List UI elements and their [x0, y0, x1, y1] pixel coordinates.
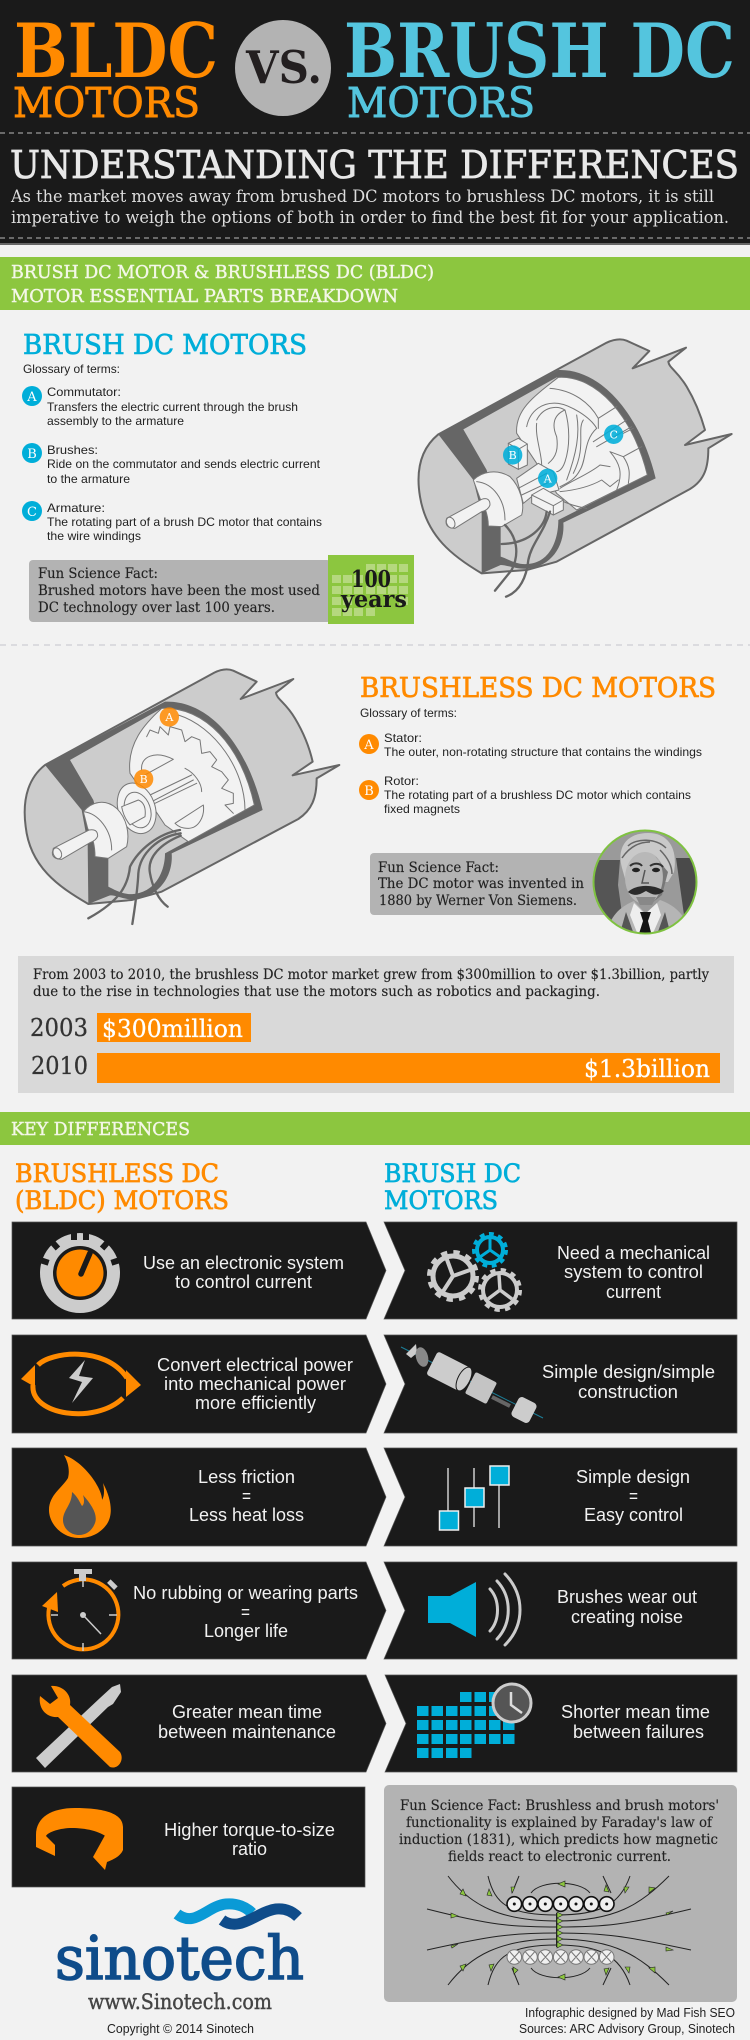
section banner: key differences: [0, 1112, 750, 1145]
intro paragraph: imperative to weigh the options of both in order to find the best fit for your application.: [11, 208, 729, 228]
website address: www.Sinotech.com: [88, 1990, 272, 2014]
icon: calendar clock: [417, 1684, 531, 1758]
row 5 left: maintenance: [12, 1675, 386, 1772]
row 1 left: electronic control: [12, 1222, 386, 1319]
row text: [189, 1467, 304, 1525]
callout: DC motor invention fact: Fun Science Fact:: [378, 860, 499, 876]
marker A: A: [164, 711, 174, 724]
callout: brushed motors fun fact: Brushed motors have been the most used: [38, 583, 320, 599]
title: BLDC motors: [13, 7, 218, 127]
row text: Easy control: [584, 1505, 683, 1525]
term: brushes: B: [27, 447, 37, 462]
term: rotor: [359, 774, 691, 816]
row text: [561, 1702, 710, 1742]
callout: brushed motors fun fact: DC technology over last 100 years.: [38, 600, 275, 616]
marker B: B: [509, 449, 517, 462]
panel: brush DC motors glossary: [22, 329, 322, 543]
icon: speaker: [428, 1574, 520, 1645]
column heading: brushless: [15, 1159, 229, 1215]
row 6 left: torque: [12, 1787, 365, 1887]
term: rotor: fixed magnets: [384, 802, 460, 816]
callout: brushed motors fun fact: Fun Science Fact:: [38, 566, 158, 582]
row text: No rubbing or wearing parts: [133, 1583, 358, 1603]
icon: flame: [49, 1455, 111, 1538]
bar: 2003: $300million: [102, 1015, 243, 1043]
header banner: [0, 0, 750, 245]
credits and sources: Sources: ARC Advisory Group, Sinotech: [519, 2021, 735, 2036]
diagram: brush DC motor cutaway: [419, 339, 732, 597]
bar: 2010: $1.3billion: [584, 1055, 710, 1083]
term: armature: the wire windings: [47, 529, 141, 543]
fact text: functionality is explained by Faraday's law of: [406, 1815, 714, 1831]
row text: system to control: [564, 1262, 703, 1282]
marker B: [503, 445, 522, 465]
column heading: brush: MOTORS: [384, 1186, 498, 1215]
term: stator: A: [363, 738, 374, 753]
panel: market growth chart: [18, 956, 734, 1093]
row text: [557, 1587, 697, 1627]
callout: DC motor invention fact: The DC motor was invented in: [378, 876, 584, 892]
row 4 left: longer life: [12, 1562, 386, 1659]
icon: tools: [36, 1684, 122, 1768]
section banner: key differences: KEY DIFFERENCES: [11, 1119, 190, 1140]
row 1 right: mechanical control: [384, 1222, 737, 1319]
row text: [557, 1243, 710, 1302]
icon: dial: [39, 1231, 121, 1313]
callout: DC motor invention fact: [370, 853, 630, 915]
row text: current: [606, 1282, 661, 1302]
row text: =: [242, 1486, 251, 1506]
term: rotor: Rotor:: [384, 774, 419, 788]
row text: between maintenance: [158, 1722, 336, 1742]
icon: sliders: [440, 1466, 509, 1530]
icon: power cycle: [21, 1354, 141, 1414]
fact text: Fun Science Fact: Brushless and brush motors': [400, 1798, 719, 1814]
row text: construction: [578, 1382, 678, 1402]
row 5 right: failures: [385, 1675, 737, 1772]
diagram: magnetic field lines: [427, 1876, 691, 1985]
term: armature: [22, 501, 322, 543]
column heading: brushless: (BLDC) MOTORS: [15, 1186, 229, 1215]
credits and sources: Infographic designed by Mad Fish SEO: [525, 2005, 735, 2020]
fact text: induction (1831), which predicts how magnetic: [399, 1832, 718, 1848]
copyright: Copyright © 2014 Sinotech: [107, 2022, 254, 2036]
market growth text: due to the rise in technologies that use the motors such as robotics and packaging.: [33, 984, 600, 1000]
row text: to control current: [175, 1272, 312, 1292]
market growth text: From 2003 to 2010, the brushless DC motor market grew from $300million to over $1.3billion, partly: [33, 967, 709, 983]
row text: ratio: [232, 1839, 267, 1859]
row text: =: [629, 1486, 638, 1506]
heading: brush DC motors: BRUSH DC MOTORS: [23, 329, 307, 361]
callout: DC motor invention fact: 1880 by Werner Von Siemens.: [379, 893, 577, 909]
row 3 left: less friction: [12, 1448, 386, 1546]
row text: =: [241, 1602, 250, 1622]
row text: Less friction: [198, 1467, 295, 1487]
logo waves: [177, 1904, 298, 1924]
term: stator: The outer, non-rotating structure that contains the windings: [384, 745, 702, 759]
badge: 100 years: 100: [351, 566, 391, 593]
glossary label: Glossary of terms:: [23, 362, 120, 376]
term: commutator: Transfers the electric current through the brush: [47, 400, 298, 414]
term: brushes: Brushes:: [47, 443, 98, 457]
row 4 right: brush noise: [384, 1562, 737, 1659]
bar: 2003: 2003: [30, 1014, 88, 1042]
row 2 right: simple construction: [384, 1335, 737, 1433]
portrait: Werner von Siemens: [592, 830, 698, 934]
term: brushes: to the armature: [47, 472, 130, 486]
marker A: [538, 469, 557, 488]
fact text: [399, 1798, 719, 1865]
row text: [143, 1253, 344, 1292]
row text: Shorter mean time: [561, 1702, 710, 1722]
section banner: parts breakdown: [0, 257, 750, 310]
marker A: A: [543, 472, 553, 485]
row text: creating noise: [571, 1607, 683, 1627]
fact text: fields react to electronic current.: [448, 1849, 671, 1865]
term: armature: C: [27, 505, 37, 520]
marker C: C: [609, 428, 618, 441]
term: brushes: Ride on the commutator and sends electric current: [47, 457, 321, 471]
glossary label: Glossary of terms:: [360, 706, 457, 720]
intro paragraph: [10, 187, 729, 228]
bar: 2010: [31, 1052, 720, 1083]
row text: [542, 1362, 715, 1402]
row text: into mechanical power: [164, 1374, 346, 1394]
row text: Greater mean time: [172, 1702, 322, 1722]
row text: Higher torque-to-size: [164, 1820, 335, 1840]
row text: Brushes wear out: [557, 1587, 697, 1607]
panel: Faraday fun fact: [384, 1785, 737, 2002]
term: rotor: B: [364, 784, 374, 799]
marker C: [604, 425, 623, 444]
icon: exploded motor: [401, 1344, 543, 1424]
row text: Less heat loss: [189, 1505, 304, 1525]
marker A: [160, 707, 179, 727]
term: commutator: A: [26, 390, 37, 405]
row 3 right: easy control: [384, 1448, 737, 1546]
term: rotor: The rotating part of a brushless DC motor which contains: [384, 788, 691, 802]
title: BLDC motors: MOTORS: [13, 79, 200, 127]
row text: [576, 1467, 690, 1525]
credits and sources: [519, 2005, 735, 2036]
title: brush DC motors: MOTORS: [347, 79, 535, 127]
title: BLDC motors: BLDC: [14, 7, 218, 95]
term: brushes: [22, 443, 321, 486]
section banner: parts breakdown: BRUSH DC MOTOR & BRUSHLESS DC (BLDC): [11, 262, 434, 283]
bar: 2003: [30, 1013, 251, 1043]
term: stator: [359, 731, 702, 759]
badge: 100 years: [328, 555, 414, 624]
heading: brushless DC motors: BRUSHLESS DC MOTORS: [360, 672, 716, 704]
icon: stopwatch: [42, 1569, 118, 1651]
marker B: [134, 769, 153, 789]
row text: Need a mechanical: [557, 1243, 710, 1263]
term: stator: Stator:: [384, 731, 422, 745]
row text: Use an electronic system: [143, 1253, 344, 1273]
market growth text: [33, 967, 709, 1000]
row text: Simple design: [576, 1467, 690, 1487]
diagram: brushless DC motor cutaway: [25, 669, 339, 924]
logo: Sinotech: [55, 1904, 304, 2036]
vs badge: [235, 20, 331, 116]
row text: Simple design/simple: [542, 1362, 715, 1382]
row text: [133, 1583, 358, 1641]
term: armature: The rotating part of a brush DC motor that contains: [47, 515, 322, 529]
row text: Longer life: [204, 1621, 288, 1641]
term: commutator: [22, 385, 298, 428]
intro paragraph: As the market moves away from brushed DC motors to brushless DC motors, it is still: [10, 187, 714, 207]
marker B: B: [140, 773, 148, 786]
vs badge: VS.: [245, 41, 322, 94]
badge: 100 years: years: [340, 586, 407, 613]
row text: [157, 1355, 353, 1413]
panel: brushless DC motors glossary: [359, 672, 716, 816]
icon: gears: [430, 1235, 519, 1309]
row text: between failures: [573, 1722, 704, 1742]
row text: Convert electrical power: [157, 1355, 353, 1375]
term: armature: Armature:: [47, 501, 105, 515]
logo wordmark: sinotech: [55, 1924, 304, 1994]
term: commutator: assembly to the armature: [47, 414, 184, 428]
row text: [164, 1820, 335, 1859]
term: commutator: Commutator:: [47, 385, 121, 399]
bar: 2010: 2010: [31, 1052, 88, 1080]
column heading: brush: [384, 1159, 521, 1215]
column heading: brush: BRUSH DC: [384, 1159, 521, 1188]
column heading: brushless: BRUSHLESS DC: [15, 1159, 219, 1188]
row text: more efficiently: [195, 1393, 316, 1413]
icon: rotation arrow: [36, 1808, 123, 1870]
callout: brushed motors fun fact: [29, 560, 331, 622]
row text: [158, 1702, 336, 1742]
section banner: parts breakdown: MOTOR ESSENTIAL PARTS BREAKDOWN: [11, 286, 398, 307]
row 2 left: efficient conversion: [12, 1335, 386, 1433]
